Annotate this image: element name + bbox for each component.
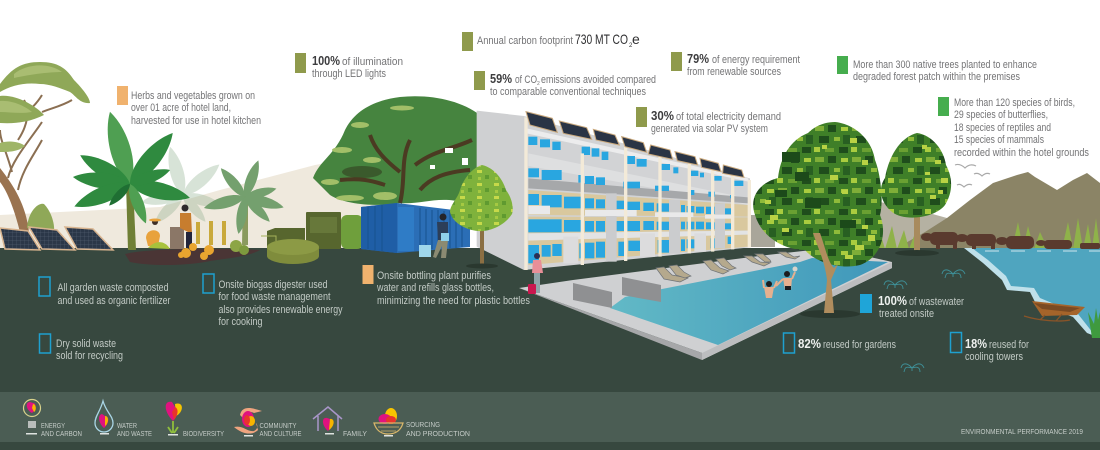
icon: water and waste [95,401,113,434]
callout: renewable energy: 79% [687,51,709,66]
callout: native trees [837,56,1037,83]
callout: reuse for gardens: 82% [798,336,821,351]
label: sourcing and production [406,422,470,438]
callout: native trees: More than 300 native trees planted to enhance [853,59,1037,71]
label: sourcing and production: AND PRODUCTION [406,431,470,438]
label: community and culture: COMMUNITY [260,423,297,430]
annex behind trees [751,215,775,247]
report label: ENVIRONMENTAL PERFORMANCE 2019 [961,429,1083,436]
callout: renewable energy: of energy requirement [712,54,800,66]
callout: herbs and vegetables: harvested for use in hotel kitchen [131,115,261,127]
callout: LED lighting: 100% [312,53,340,68]
callout: carbon footprint: 730 MT CO [575,31,628,47]
callout: reuse for cooling towers: reused for [989,339,1029,351]
birds [955,164,990,187]
callout: renewable energy [671,51,800,78]
callout: bottling plant: Onsite bottling plant purifies [377,270,491,282]
callout: LED lighting: of illumination [342,56,403,68]
callout: wastewater: 100% [878,293,907,308]
callout: dry solid waste: sold for recycling [56,350,123,362]
label: water and waste: AND WASTE [117,431,152,438]
callout: herbs and vegetables [117,86,261,127]
faded banana plant [140,145,224,227]
building side wall [477,111,524,270]
callout: garden waste: and used as organic fertilizer [58,295,171,307]
boat [1024,301,1085,321]
left tree [0,62,90,232]
callout: garden waste: All garden waste composted [58,282,168,294]
callout: renewable energy: from renewable sources [687,66,781,78]
poolside benches [573,277,661,308]
footer band [0,392,1100,442]
small tree by building [450,165,513,268]
large tree [313,96,480,205]
callout: dry solid waste [40,334,123,362]
icon: community and culture [234,408,262,436]
callout: CO2 avoided: of CO [515,74,537,86]
label: water and waste [117,423,152,438]
shipping container bottling plant [361,203,470,253]
soil patch [125,249,260,265]
building facade [524,116,750,270]
label: community and culture: AND CULTURE [260,431,302,438]
background hill [0,150,400,249]
callout: solar PV: 30% [651,108,674,123]
callout: reuse for cooling towers [950,332,1029,363]
callout: species recorded: 15 species of mammals [954,134,1044,146]
large banana plant [71,109,192,250]
woman with suitcase [528,253,543,294]
callout: CO2 avoided [474,71,656,98]
bush [27,204,54,232]
label: water and waste: WATER [117,423,137,430]
callout: biogas: for food waste management [218,291,330,303]
mountain [895,172,1100,249]
pool deck [519,248,892,360]
callout: CO2 avoided: to comparable conventional techniques [490,86,646,98]
ground [0,248,1100,450]
buffalo herd [921,232,1100,249]
icon: family [313,407,342,434]
label: energy and carbon: ENERGY [41,423,65,430]
callout: CO2 avoided: 2 [537,81,540,87]
tall grass [815,218,1100,249]
swimmers [763,266,798,298]
callout: reuse for cooling towers: 18% [965,336,987,351]
callout: bottling plant [362,265,530,307]
icon: energy and carbon [24,400,40,434]
vegetable crops [148,221,249,260]
callout: wastewater: treated onsite [879,308,934,320]
reeds [1088,308,1100,338]
callout: dry solid waste: Dry solid waste [56,338,116,350]
hotel building [477,111,750,270]
callout: biogas: for cooking [218,316,262,328]
windows [528,137,743,263]
callout: carbon footprint: e [632,31,640,47]
grey wall blocks [563,193,725,263]
callout: garden waste [39,277,171,307]
lake [964,248,1100,338]
small banana plant [202,159,285,245]
biogas digester [261,212,341,264]
callout: species recorded: 18 species of reptiles and [954,122,1051,134]
bush behind container [341,215,363,249]
callout: bottling plant: minimizing the need for plastic bottles [377,295,530,307]
left solar panels [0,227,113,250]
water sprinklers [884,270,965,372]
facade slabs and beige walls [527,128,748,265]
callout: reuse for gardens [784,333,896,353]
rooftop solar panels [526,112,744,177]
label: sourcing and production: SOURCING [406,422,440,429]
callout: herbs and vegetables: over 01 acre of hotel land, [131,102,231,114]
sun loungers [656,252,800,282]
farmers [146,204,192,249]
callout: biogas [203,274,343,328]
callout: solar PV [636,107,781,135]
callout: biogas: Onsite biogas digester used [218,279,328,291]
callout: solar PV: generated via solar PV system [651,123,768,135]
callout: CO2 avoided: emissions avoided compared [541,74,656,86]
callout: biogas: also provides renewable energy [218,304,343,316]
man carrying bottles [419,214,449,258]
callout: carbon footprint [462,31,640,51]
callout: CO2 avoided: 59% [490,71,512,86]
icon: biodiversity [166,402,182,436]
label: family: FAMILY [343,431,367,438]
cream columns [526,117,749,270]
label: energy and carbon [41,423,82,438]
balconies [528,206,733,219]
callout: solar PV: of total electricity demand [676,111,781,123]
callout: carbon footprint: 2 [629,43,633,49]
callout: LED lighting [295,53,403,80]
label: biodiversity: BIODIVERSITY [183,431,224,438]
background tree [881,133,951,256]
label: energy and carbon: AND CARBON [41,431,82,438]
callout: native trees: degraded forest patch within the premises [853,71,1020,83]
callout: bottling plant: water and refills glass bottles, [376,282,494,294]
swimming pool [610,258,888,345]
callout: wastewater: of wastewater [909,296,964,308]
callout: species recorded [938,97,1089,159]
callout: carbon footprint: Annual carbon footprint [477,35,573,47]
callout: reuse for gardens: reused for gardens [823,339,896,351]
grey distant hill [860,202,975,249]
callout: species recorded: 29 species of butterflies, [954,109,1048,121]
callout: reuse for cooling towers: cooling towers [965,351,1023,363]
label: community and culture [260,423,302,438]
icon: sourcing and production [374,408,403,436]
callout: LED lighting: through LED lights [312,68,386,80]
callout: herbs and vegetables: Herbs and vegetables grown on [131,90,255,102]
foreground tree with trunk [753,122,883,318]
callout: wastewater [860,293,964,320]
